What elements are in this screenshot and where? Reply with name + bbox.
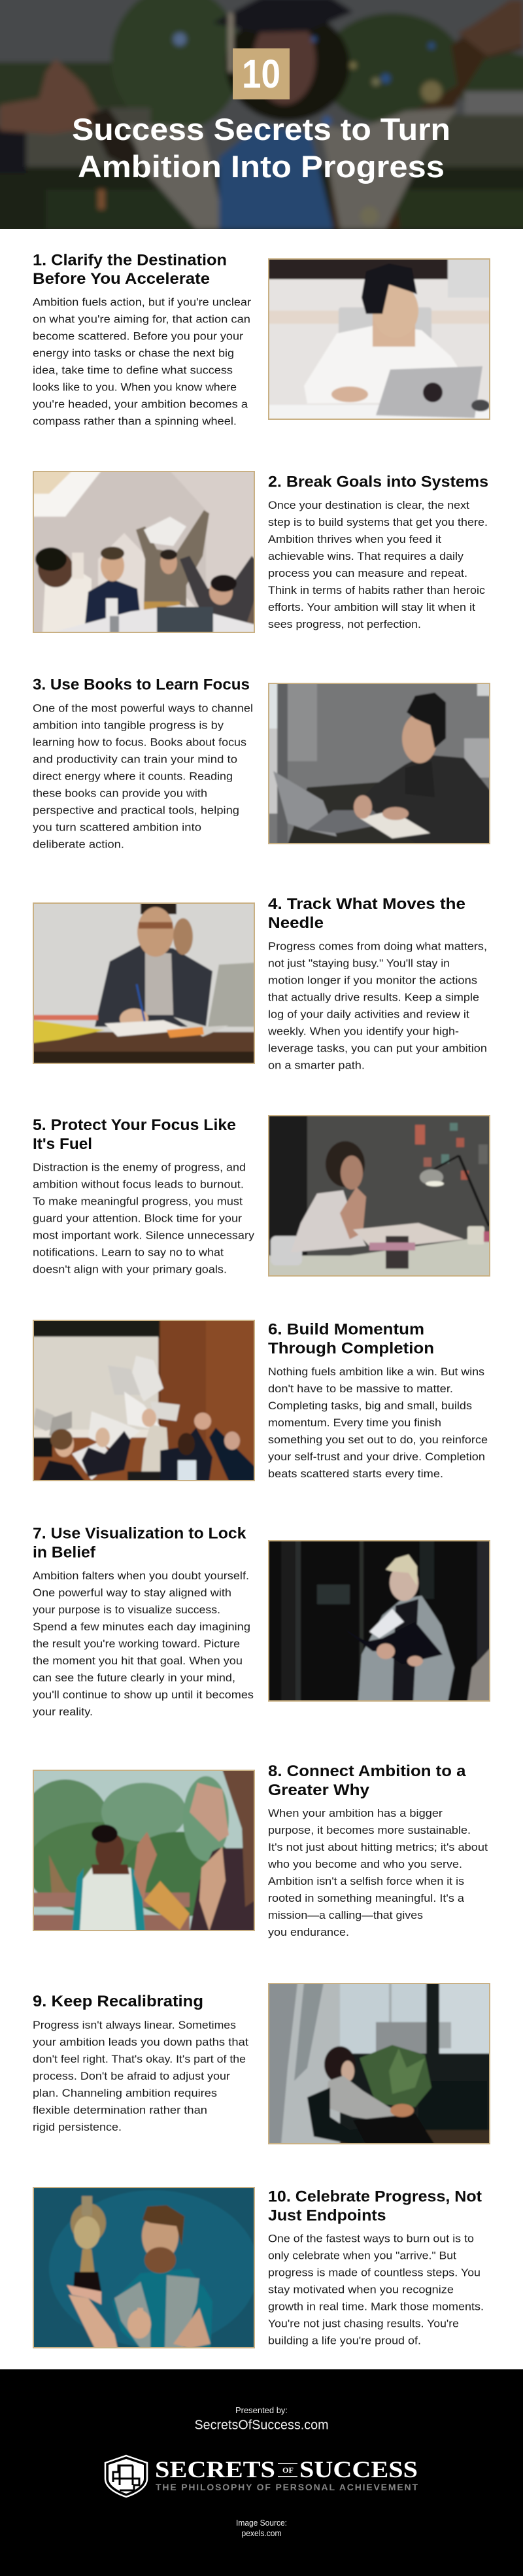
body text 10 (268, 2233, 484, 2346)
body text 8: Ambition isn't a selfish force when it is (268, 1876, 464, 1887)
body text 3: direct energy where it counts. Reading (33, 770, 233, 782)
photo: team celebrating (33, 471, 255, 633)
body text 1: become scattered. Before you pour your (33, 331, 244, 343)
body text 2: step is to build systems that get you there. (268, 517, 488, 528)
footer panel (0, 2369, 523, 2576)
photo: man with notebook (268, 683, 490, 844)
heading 1 (33, 251, 227, 288)
body text 4: Progress comes from doing what matters, (268, 940, 487, 952)
body text 10: progress is made of countless steps. You (268, 2267, 481, 2278)
body text 7: Spend a few minutes each day imagining (33, 1621, 250, 1633)
heading 4 (268, 895, 465, 932)
body text 10: growth in real time. Mark those moments. (268, 2301, 484, 2312)
body text 5: most important work. Silence unnecessary (33, 1229, 255, 1241)
body text 1: looks like to you. When you know where (33, 382, 237, 394)
body text 4: motion longer if you monitor the actions (268, 974, 477, 986)
body text 7: the moment you hit that goal. When you (33, 1655, 243, 1667)
body text 3: One of the most powerful ways to channel (33, 702, 253, 714)
heading 8: Greater Why (268, 1781, 369, 1799)
heading 6: 6. Build Momentum (268, 1321, 424, 1338)
image source: Image Source: (236, 2518, 287, 2528)
body text 1 (33, 297, 252, 428)
body text 6: something you set out to do, you reinforce (268, 1434, 488, 1446)
body text 8: When your ambition has a bigger (268, 1808, 443, 1819)
photo: woman reading folder (268, 1540, 490, 1702)
body text 4: not just "staying busy." You'll stay in (268, 957, 450, 969)
body text 6: beats scattered starts every time. (268, 1468, 443, 1480)
panel: step 3 (33, 676, 490, 850)
panel: step 7 (33, 1525, 490, 1718)
image source: pexels.com (242, 2529, 281, 2538)
body text 2: efforts. Your ambition will stay lit when it (268, 602, 475, 613)
presented by: SecretsOfSuccess.com (195, 2418, 328, 2433)
heading 4: 4. Track What Moves the (268, 895, 465, 913)
body text 7: Ambition falters when you doubt yourself. (33, 1570, 249, 1582)
body text 1: on what you're aiming for, that action can (33, 314, 250, 326)
body text 8: mission—a calling—that gives (268, 1910, 423, 1921)
heading 3: 3. Use Books to Learn Focus (33, 676, 250, 693)
body text 7: the result you're working toward. Picture (33, 1638, 240, 1650)
body text 4 (267, 940, 487, 1071)
body text 9: process. Don't be afraid to adjust your (33, 2070, 231, 2082)
body text 3: these books can provide you with (33, 787, 207, 799)
panel: step 2 (33, 471, 488, 633)
panel: step 8 (20, 1762, 488, 1938)
body text 8: you endurance. (268, 1927, 349, 1938)
presented by (195, 2405, 328, 2433)
wordmark (155, 2456, 418, 2492)
body text 3: deliberate action. (33, 838, 124, 850)
photo: man on phone writing (33, 902, 255, 1064)
panel: step 4 (33, 895, 487, 1071)
body text 2: Ambition thrives when you feed it (268, 534, 441, 545)
body text 10: You're not just chasing results. You're (268, 2318, 459, 2329)
body text 1: Ambition fuels action, but if you're unclear (33, 297, 252, 309)
photo: man holding trophy (33, 2187, 258, 2348)
body text 9 (33, 2019, 248, 2133)
panel: step 9 (33, 1983, 490, 2144)
title: Ambition Into Progress (78, 149, 445, 184)
body text 5: ambition without focus leads to burnout. (33, 1178, 244, 1190)
body text 5 (33, 1161, 255, 1275)
body text 3: learning how to focus. Books about focus (33, 736, 246, 748)
heading 7 (33, 1525, 246, 1562)
wordmark: OF (282, 2465, 294, 2475)
photo: stressed woman at desk (268, 1115, 490, 1277)
body text 3: ambition into tangible progress is by (33, 719, 224, 731)
body text 6: your self-trust and your drive. Completion (268, 1451, 485, 1463)
panel: step 5 (33, 1115, 490, 1277)
heading 6: Through Completion (268, 1339, 434, 1358)
heading 6 (268, 1321, 434, 1358)
body text 9: Progress isn't always linear. Sometimes (33, 2019, 236, 2031)
body text 5: To make meaningful progress, you must (33, 1195, 243, 1207)
body text 6: Completing tasks, big and small, builds (268, 1400, 472, 1412)
body text 6: don't have to be massive to matter. (268, 1383, 453, 1395)
body text 7: your purpose is to visualize success. (33, 1604, 220, 1616)
wordmark: THE PHILOSOPHY OF PERSONAL ACHIEVEMENT (156, 2482, 418, 2492)
wordmark: SECRETS (155, 2456, 275, 2482)
body text 9: your ambition leads you down paths that (33, 2036, 248, 2048)
body text 7: One powerful way to stay aligned with (33, 1587, 231, 1599)
heading 10: 10. Celebrate Progress, Not (268, 2188, 482, 2205)
presented by: Presented by: (235, 2405, 288, 2415)
body text 7 (33, 1570, 254, 1718)
body text 5: Distraction is the enemy of progress, and (33, 1161, 246, 1173)
body text 8: purpose, it becomes more sustainable. (268, 1825, 471, 1836)
body text 1: energy into tasks or chase the next big (33, 348, 234, 360)
heading 4: Needle (268, 914, 324, 932)
body text 3: perspective and practical tools, helping (33, 804, 239, 816)
badge: number 10: 10 (242, 52, 280, 96)
body text 7: your reality. (33, 1706, 93, 1718)
body text 4: weekly. When you identify your high- (267, 1025, 459, 1037)
body text 4: on a smarter path. (268, 1059, 365, 1071)
body text 5: guard your attention. Block time for your (33, 1212, 243, 1224)
body text 1: you're headed, your ambition becomes a (33, 399, 248, 411)
wordmark: SUCCESS (299, 2456, 418, 2482)
body text 5: doesn't align with your primary goals. (33, 1263, 227, 1275)
body text 3 (33, 702, 253, 850)
heading 1: 1. Clarify the Destination (33, 251, 227, 269)
heading 9: 9. Keep Recalibrating (33, 1993, 203, 2010)
heading 10: Just Endpoints (268, 2207, 386, 2225)
body text 8: who you become and who you serve. (267, 1859, 462, 1870)
body text 2: sees progress, not perfection. (268, 619, 421, 630)
body text 9: plan. Channeling ambition requires (33, 2087, 217, 2099)
header banner (0, 0, 523, 235)
heading 7: in Belief (33, 1543, 96, 1562)
body text 1: compass rather than a spinning wheel. (33, 416, 237, 428)
body text 6: Nothing fuels ambition like a win. But wins (268, 1366, 484, 1378)
logo: Secrets of Success (105, 2456, 418, 2497)
icon: shield monogram (105, 2456, 147, 2497)
body text 2: Once your destination is clear, the next (268, 500, 469, 511)
photo: two women talking outdoors (20, 1770, 255, 1931)
body text 4: leverage tasks, you can put your ambition (268, 1042, 487, 1054)
heading 8: 8. Connect Ambition to a (268, 1762, 466, 1780)
heading 10 (268, 2188, 482, 2225)
heading 1: Before You Accelerate (33, 270, 210, 288)
body text 4: that actually drive results. Keep a simple (268, 991, 479, 1003)
body text 7: can see the future clearly in your mind, (33, 1672, 235, 1684)
body text 2: achievable wins. That requires a daily (268, 551, 464, 562)
body text 5: notifications. Learn to say no to what (33, 1246, 224, 1258)
body text 7: you'll continue to show up until it becomes (33, 1689, 254, 1701)
hero photo: graduate throwing confetti (0, 0, 523, 229)
heading 7: 7. Use Visualization to Lock (33, 1525, 246, 1542)
heading 5: 5. Protect Your Focus Like (33, 1116, 236, 1134)
image source (236, 2518, 287, 2538)
panel: step 10 (33, 2187, 484, 2348)
panel: step 6 (33, 1320, 488, 1481)
body text 8: rooted in something meaningful. It's a (268, 1893, 465, 1904)
heading 5: It's Fuel (33, 1135, 92, 1153)
heading 2: 2. Break Goals into Systems (268, 473, 488, 490)
body text 8 (267, 1808, 488, 1938)
body text 10: stay motivated when you recognize (268, 2284, 454, 2295)
heading 8 (268, 1762, 466, 1799)
heading 5 (33, 1116, 236, 1153)
body text 9: flexible determination rather than (33, 2104, 207, 2116)
body text 10: building a life you're proud of. (268, 2335, 421, 2346)
body text 9: don't feel right. That's okay. It's part of the (33, 2053, 246, 2065)
body text 2 (268, 500, 488, 630)
body text 10: One of the fastest ways to burn out is to (268, 2233, 474, 2244)
body text 3: you turn scattered ambition into (33, 821, 201, 833)
body text 4: log of your daily activities and review it (268, 1008, 469, 1020)
badge: number 10 (233, 48, 290, 99)
body text 6 (268, 1366, 488, 1480)
photo: woman working by window (268, 1983, 490, 2144)
body text 10: only celebrate when you "arrive." But (268, 2250, 456, 2261)
body text 9: rigid persistence. (33, 2121, 122, 2133)
title: Success Secrets to Turn (72, 112, 450, 146)
title (72, 112, 450, 184)
photo: man at laptop (268, 258, 490, 420)
body text 2: process you can measure and repeat. (268, 568, 467, 579)
body text 3: and productivity can train your mind to (33, 753, 237, 765)
photo: team throwing papers (33, 1320, 255, 1481)
body text 6: momentum. Every time you finish (268, 1417, 441, 1429)
body text 2: Think in terms of habits rather than heroic (268, 585, 485, 596)
body text 1: idea, take time to define what success (33, 365, 233, 377)
panel: step 1 (33, 251, 490, 428)
body text 8: It's not just about hitting metrics; it's about (268, 1842, 488, 1853)
